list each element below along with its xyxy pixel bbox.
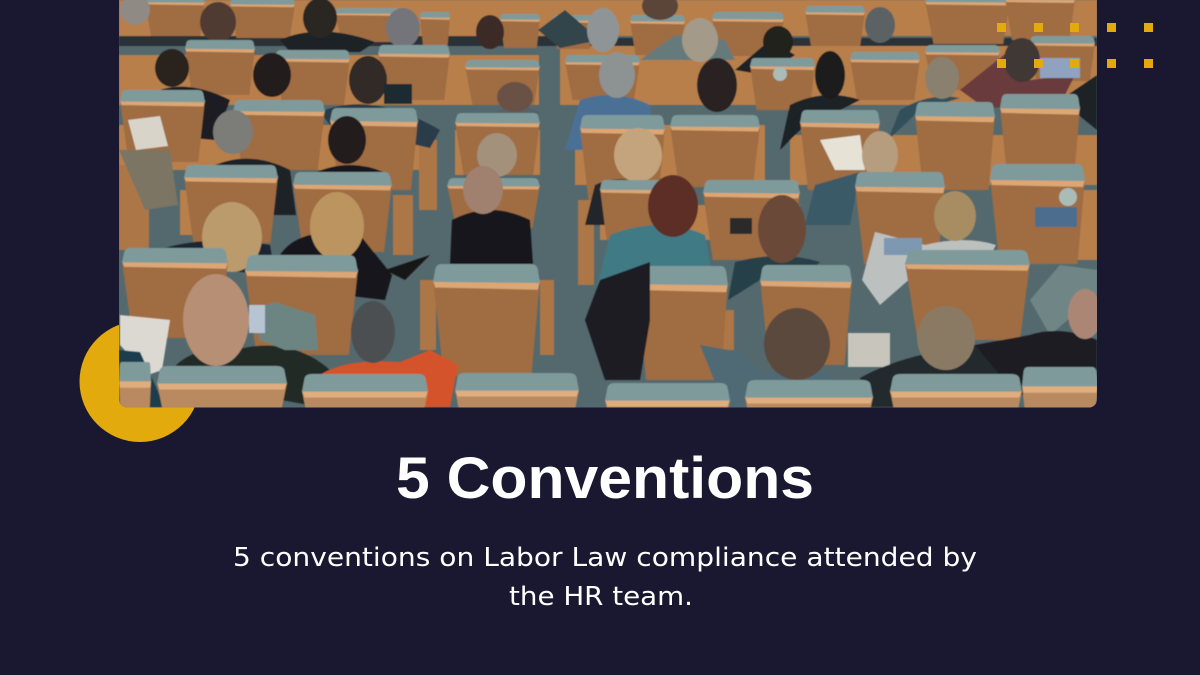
subtitle: the HR team. <box>509 582 693 612</box>
title: 5 Conventions <box>396 446 814 511</box>
back rows desks <box>119 0 1097 260</box>
seats row 1 <box>119 362 151 408</box>
mugs and tablet <box>383 66 788 104</box>
desks row 4 papers <box>128 116 168 150</box>
seats row 5 <box>185 40 255 95</box>
people row 3 <box>165 241 275 275</box>
people row 2 <box>170 346 330 407</box>
photo: conference audience seen from above <box>119 0 1102 425</box>
people row 4 <box>205 159 296 215</box>
people row 5 <box>155 87 230 140</box>
seats row 3 <box>184 165 278 243</box>
decorative yellow circle <box>80 321 200 442</box>
seats row 6 <box>145 0 205 36</box>
subtitle: 5 conventions on Labor Law compliance attended by <box>233 543 977 573</box>
subtitle <box>233 543 977 612</box>
seats row 4 <box>120 90 205 162</box>
black jacket on seat <box>585 262 650 380</box>
dark gaps between back rows <box>119 36 1097 46</box>
side armrests <box>119 140 734 355</box>
decorative dot grid <box>997 23 1153 68</box>
grey-teal seat on right edge <box>1030 265 1097 335</box>
people row 6 <box>280 31 375 52</box>
seats row 2 <box>122 248 228 338</box>
